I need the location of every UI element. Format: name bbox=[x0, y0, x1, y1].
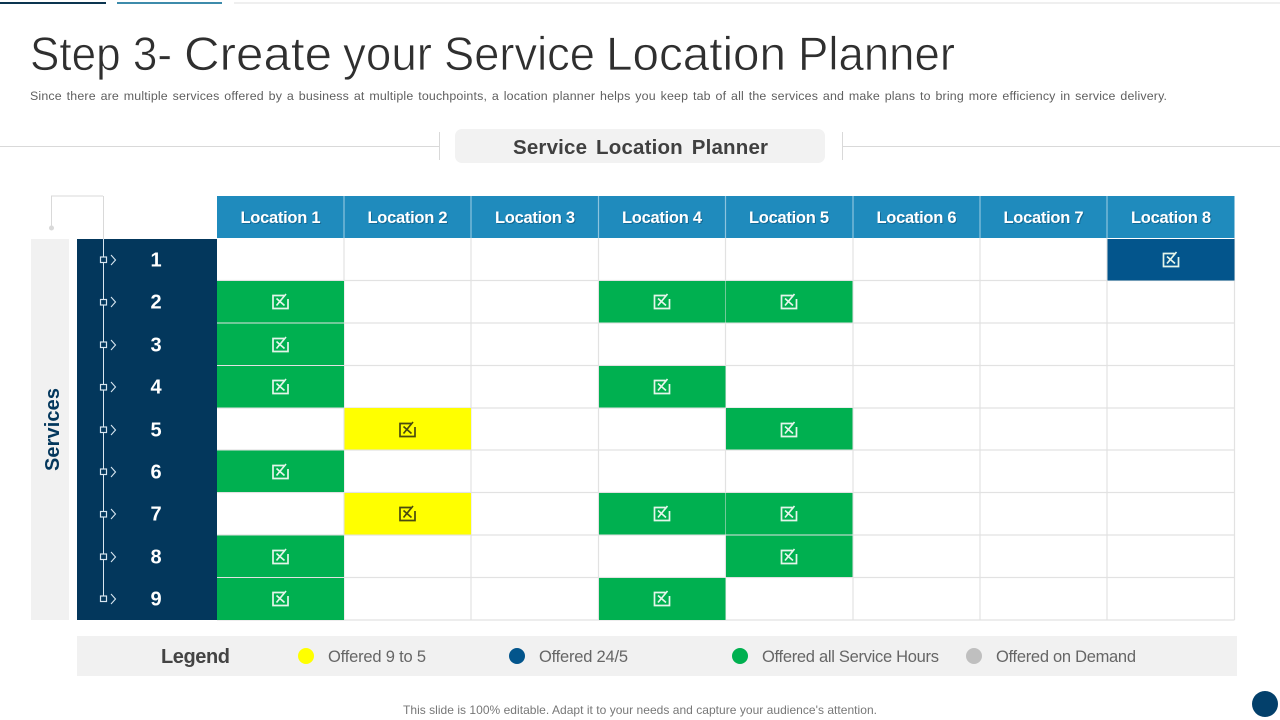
cell: service 2 location 1 bbox=[217, 281, 344, 322]
cell: service 9 location 1 bbox=[217, 578, 344, 620]
legend item: offered on demand: Offered on Demand bbox=[996, 648, 1136, 666]
legend: Legend bbox=[161, 646, 230, 668]
service number column: 3 bbox=[150, 334, 162, 356]
section heading: Service Location Planner: Service Location Planner bbox=[513, 136, 768, 159]
service number column bbox=[49, 196, 217, 620]
service number column: 8 bbox=[150, 546, 162, 568]
location column headers: Location 3 bbox=[495, 209, 575, 227]
cell: service 9 location 4 bbox=[599, 578, 726, 620]
service number column: 1 bbox=[150, 250, 162, 272]
cell: service 3 location 1 bbox=[217, 324, 344, 365]
cell: service 6 location 1 bbox=[217, 450, 344, 492]
legend item: offered 9 to 5: Offered 9 to 5 bbox=[328, 648, 426, 666]
service number column: 7 bbox=[150, 504, 162, 526]
location column headers: Location 5 bbox=[749, 209, 829, 227]
page badge bbox=[1252, 691, 1278, 717]
subtitle: Since there are multiple services offered by a business at multiple touchpoints, a location planner helps you keep tab of all the services and make plans to bring more efficiency in service delivery. bbox=[30, 89, 1167, 103]
table grid lines bbox=[217, 238, 1234, 620]
title: Step 3- bbox=[30, 27, 172, 80]
location column headers bbox=[217, 196, 1234, 238]
location column headers: Location 4 bbox=[622, 209, 703, 227]
location column headers: Location 1 bbox=[240, 209, 320, 227]
cell: service 4 location 4 bbox=[599, 366, 726, 408]
service number column: 9 bbox=[150, 588, 162, 610]
title: Location bbox=[606, 27, 786, 80]
title: Service bbox=[444, 27, 595, 80]
cell: service 8 location 5 bbox=[726, 536, 852, 577]
cell: service 2 location 5 bbox=[726, 281, 852, 322]
services side label: Services bbox=[42, 388, 64, 471]
title: Planner bbox=[798, 27, 955, 80]
legend bbox=[77, 636, 1237, 676]
location column headers: Location 6 bbox=[876, 209, 956, 227]
legend item: offered 24/5: Offered 24/5 bbox=[539, 648, 628, 666]
cell: service 7 location 2 bbox=[344, 493, 471, 534]
top accent bars bbox=[0, 2, 1280, 4]
title: your bbox=[343, 27, 432, 80]
legend item: offered all service hours: Offered all Service Hours bbox=[762, 648, 939, 666]
service number column: 5 bbox=[150, 420, 162, 442]
cell: service 5 location 5 bbox=[726, 408, 852, 450]
services side label bbox=[31, 239, 69, 620]
cell: service 2 location 4 bbox=[599, 281, 726, 322]
cell: service 7 location 5 bbox=[726, 493, 852, 534]
service number column: 2 bbox=[150, 292, 162, 314]
cell: service 5 location 2 bbox=[344, 408, 471, 450]
cell: service 8 location 1 bbox=[217, 536, 344, 577]
cell: service 7 location 4 bbox=[599, 493, 726, 534]
cell: service 1 location 8 bbox=[1108, 239, 1234, 280]
section heading: Service Location Planner bbox=[0, 129, 1280, 163]
title: Create bbox=[184, 27, 332, 80]
cell: service 4 location 1 bbox=[217, 366, 344, 408]
location column headers: Location 8 bbox=[1131, 209, 1211, 227]
service number column: 4 bbox=[150, 376, 162, 398]
service number column: 6 bbox=[150, 462, 162, 484]
footer note: This slide is 100% editable. Adapt it to your needs and capture your audience's attention. bbox=[403, 703, 877, 717]
location column headers: Location 7 bbox=[1004, 209, 1084, 227]
location column headers: Location 2 bbox=[368, 209, 448, 227]
title bbox=[30, 27, 955, 80]
